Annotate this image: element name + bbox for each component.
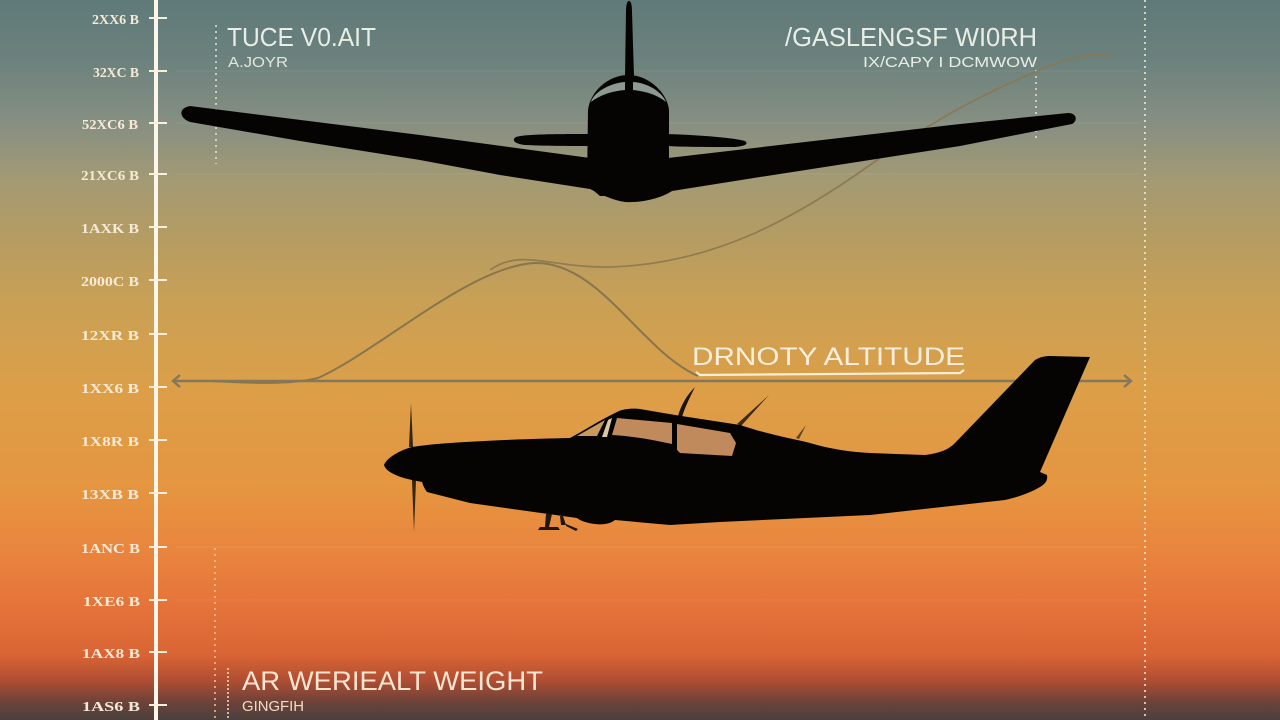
wings (181, 106, 1076, 202)
label: density altitude: DRNOTY ALTITUDE (692, 343, 965, 371)
vertical altitude axis with tick labels: 32XC B (93, 66, 139, 81)
performance curve: lower hump (210, 263, 698, 383)
vertical altitude axis with tick labels: 13XB B (81, 488, 139, 503)
tailplane (514, 134, 590, 146)
text block: top right heading (785, 22, 1038, 71)
text block: top left heading: A.JOYR (228, 54, 288, 71)
fin (625, 1, 634, 76)
text block: bottom left heading (242, 666, 543, 715)
vertical altitude axis with tick labels: 2000C B (81, 275, 139, 290)
vertical altitude axis with tick labels: 1XX6 B (81, 382, 139, 397)
vertical altitude axis with tick labels: 1AXK B (81, 222, 139, 237)
windows (612, 418, 672, 444)
cockpit glass (591, 82, 625, 102)
text block: top left heading: TUCE V0.AIT (227, 22, 376, 52)
vertical altitude axis with tick labels: 52XC6 B (82, 118, 138, 133)
vertical altitude axis with tick labels: 12XR B (81, 329, 139, 344)
faint horizontal grid lines (176, 71, 1140, 600)
vertical altitude axis with tick labels (81, 0, 167, 720)
landing gear (538, 514, 578, 531)
double-headed horizontal arrow (173, 375, 1131, 387)
vertical altitude axis with tick labels: 1AX8 B (82, 647, 140, 662)
text block: top right heading: IX/CAPY I DCMWOW (863, 54, 1038, 71)
propeller (409, 403, 416, 532)
text block: bottom left heading: AR WERIEALT WEIGHT (242, 666, 543, 696)
vertical altitude axis with tick labels: 1AS6 B (82, 700, 140, 715)
vertical altitude axis with tick labels: 21XC6 B (81, 169, 139, 184)
icon: side view airplane silhouette (384, 356, 1090, 532)
vertical altitude axis with tick labels: 2XX6 B (92, 13, 139, 28)
vertical altitude axis with tick labels: 1ANC B (81, 542, 140, 557)
vertical altitude axis with tick labels: 1XE6 B (83, 595, 140, 610)
performance curve: upper rising line (490, 54, 1110, 270)
vertical altitude axis with tick labels: 1X8R B (81, 435, 139, 450)
text block: top left heading (227, 22, 376, 71)
antennas (678, 387, 695, 417)
dotted vertical guide lines (215, 0, 1145, 720)
icon: front view airplane silhouette (181, 1, 1076, 202)
text block: bottom left heading: GINGFIH (242, 698, 304, 715)
text block: top right heading: /GASLENGSF WI0RH (785, 22, 1037, 52)
fuselage (587, 75, 669, 196)
fuselage and tail (384, 356, 1090, 525)
